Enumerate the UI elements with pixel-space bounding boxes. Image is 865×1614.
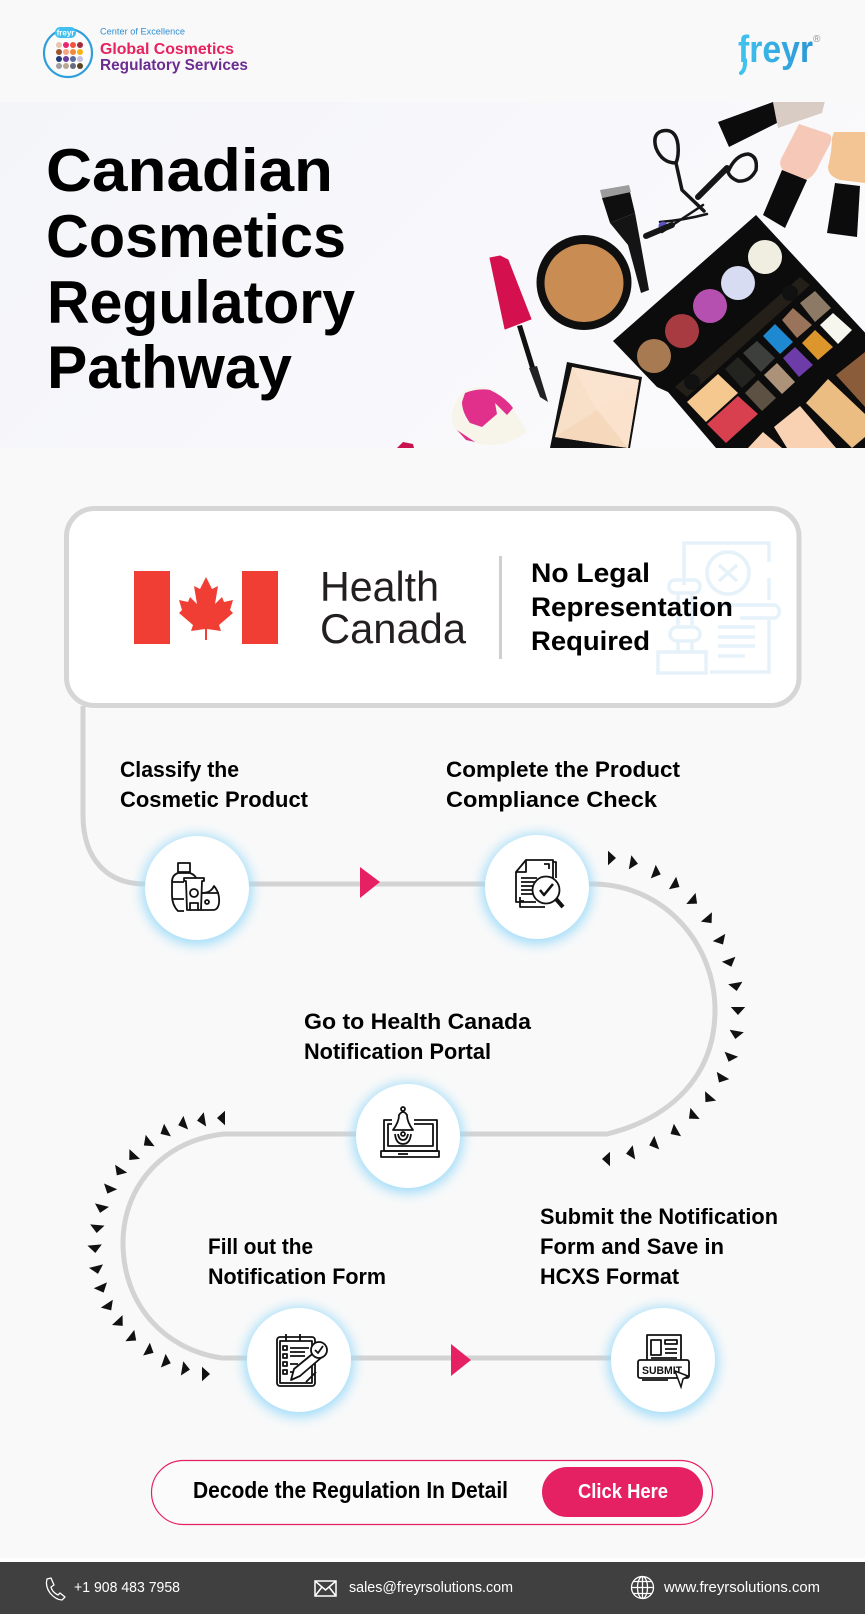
- icon: envelope: [315, 1581, 336, 1596]
- step 1 node: cosmetic products icon: [142, 835, 252, 945]
- arrow: step 4 to step 5: [451, 1344, 471, 1376]
- mascara wand: [490, 256, 548, 402]
- step 2 label: [446, 757, 681, 812]
- step 5 label: Form and Save in: [540, 1234, 724, 1259]
- call to action pill: Decode the Regulation In Detail: [193, 1477, 508, 1503]
- Health Canada wordmark: Canada: [320, 605, 467, 652]
- powder compact: [550, 362, 642, 448]
- step 3 label: Notification Portal: [304, 1039, 491, 1064]
- footer bar: [0, 1562, 865, 1614]
- chevrons: right curve direction: [602, 851, 745, 1166]
- step 3 node: notification portal icon: [353, 1083, 463, 1193]
- title: Pathway: [47, 334, 293, 401]
- text: no legal representation required: No Legal: [531, 558, 650, 588]
- freyr brand logo: freyr: [738, 29, 813, 71]
- step 1 label: [120, 757, 309, 812]
- freyr brand logo: ®: [813, 34, 821, 45]
- Health Canada wordmark: Health: [320, 563, 439, 610]
- header logo: Global Cosmetics Regulatory Services: Regulatory Services: [100, 57, 248, 74]
- icon: Canadian flag: [134, 571, 278, 644]
- call to action pill: [152, 1460, 712, 1524]
- hero banner background: [0, 102, 865, 448]
- step 2 label: Complete the Product: [446, 757, 681, 782]
- text: no legal representation required: [531, 558, 733, 656]
- step 1 label: Classify the: [120, 757, 239, 782]
- hero photo: cosmetics flat lay: [397, 101, 865, 455]
- button: click here: Click Here: [578, 1481, 668, 1503]
- step 4 label: Notification Form: [208, 1264, 386, 1289]
- step 4 label: [208, 1234, 386, 1289]
- step 5 node: submit icon: [608, 1307, 718, 1417]
- text: no legal representation required: Required: [531, 626, 650, 656]
- pathway connector line: [83, 706, 715, 1358]
- chevrons: left curve direction: [87, 1111, 225, 1381]
- eyeshadow palette: [613, 215, 865, 455]
- step 4 label: Fill out the: [208, 1234, 313, 1259]
- step 2 label: Compliance Check: [446, 787, 658, 812]
- bronzer compact: [536, 235, 632, 330]
- watermark icon: document and stamp: [658, 543, 779, 673]
- beauty sponge: [397, 387, 527, 448]
- panel: Health Canada card: [66, 508, 799, 706]
- title: Canadian: [46, 137, 333, 204]
- title: Cosmetics: [46, 203, 346, 270]
- eyelash curler: [646, 131, 756, 236]
- nail polish bottles: [718, 101, 865, 237]
- Health Canada wordmark: [320, 563, 467, 652]
- button: click here: [542, 1467, 703, 1517]
- eyeliner: [600, 185, 649, 293]
- step 1 label: Cosmetic Product: [120, 787, 309, 812]
- step 5 label: Submit the Notification: [540, 1204, 778, 1229]
- title: Regulatory: [47, 269, 356, 336]
- step 5 node: submit icon: SUBMIT: [642, 1365, 682, 1377]
- text: no legal representation required: Representation: [531, 592, 733, 622]
- step 3 label: [304, 1009, 532, 1064]
- step 3 label: Go to Health Canada: [304, 1009, 532, 1034]
- icon: phone: [46, 1578, 65, 1600]
- icon: globe: [632, 1576, 654, 1598]
- footer bar: +1 908 483 7958: [74, 1579, 180, 1596]
- header logo: Global Cosmetics Regulatory Services: [44, 26, 248, 77]
- header logo: Global Cosmetics Regulatory Services: freyr: [57, 28, 74, 38]
- header logo: Global Cosmetics Regulatory Services: Center of Excellence: [100, 26, 185, 38]
- footer bar: sales@freyrsolutions.com: [349, 1579, 513, 1596]
- step 5 label: [540, 1204, 778, 1289]
- step 5 label: HCXS Format: [540, 1264, 680, 1289]
- arrow: step 1 to step 2: [360, 867, 380, 898]
- step 4 node: notification form icon: [244, 1307, 354, 1417]
- title: [46, 137, 356, 401]
- footer bar: www.freyrsolutions.com: [663, 1579, 820, 1596]
- step 2 node: compliance check icon: [482, 834, 592, 944]
- header logo: Global Cosmetics Regulatory Services: Global Cosmetics: [100, 41, 234, 58]
